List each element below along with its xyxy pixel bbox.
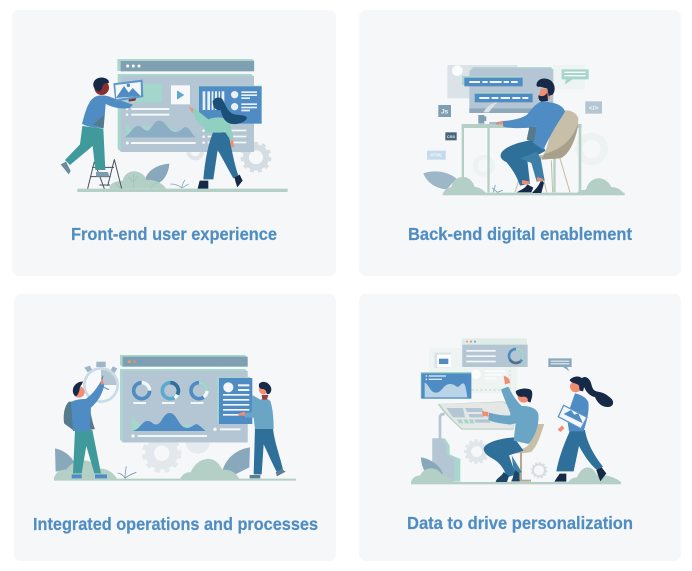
illustration: developer working at a desk: [423, 65, 625, 195]
desk: [462, 124, 582, 192]
stepladder: [88, 159, 122, 189]
area chart: [131, 413, 206, 431]
caption: Data to drive personalization: [407, 513, 633, 533]
leaves and plants: [109, 164, 188, 189]
panel: integrated operations and processes: [14, 294, 336, 561]
illustration: team reviewing dashboards and stopwatch: [54, 355, 296, 481]
panel: front-end user experience: [12, 10, 336, 276]
illustration: front-end designers building a web page: [61, 59, 288, 192]
code tags: [427, 101, 602, 160]
code tags: HTML: [430, 153, 443, 158]
panel: data to drive personalization: [359, 294, 681, 561]
speech bubble: [548, 358, 572, 371]
chair: [515, 110, 578, 192]
plants: [54, 447, 250, 479]
code tags: Js: [441, 108, 449, 115]
illustration: analyst at console and colleague: [411, 338, 621, 484]
seated analyst: [482, 375, 539, 482]
code tags: </>: [589, 105, 599, 112]
plants: [411, 457, 621, 482]
report card: [217, 377, 252, 424]
walking woman with tablet: [554, 377, 613, 482]
caption: Integrated operations and processes: [33, 514, 318, 534]
caption: Front-end user experience: [71, 224, 277, 244]
man on ladder holding picture: [61, 78, 143, 177]
stool: [504, 424, 544, 482]
caption: Back-end digital enablement: [408, 224, 632, 244]
control console: [432, 401, 514, 482]
code tags: CSS: [447, 134, 455, 139]
man with stopwatch: [64, 377, 107, 478]
woman with long hair pointing: [189, 97, 247, 189]
panel: back-end digital enablement: [359, 10, 681, 276]
dashboard window: [462, 338, 528, 367]
chart window: [421, 372, 471, 399]
plants: [423, 171, 624, 194]
bearded developer: [489, 78, 565, 193]
man holding report: [238, 382, 286, 478]
donut charts: [134, 383, 207, 399]
stopwatch: [83, 362, 119, 403]
